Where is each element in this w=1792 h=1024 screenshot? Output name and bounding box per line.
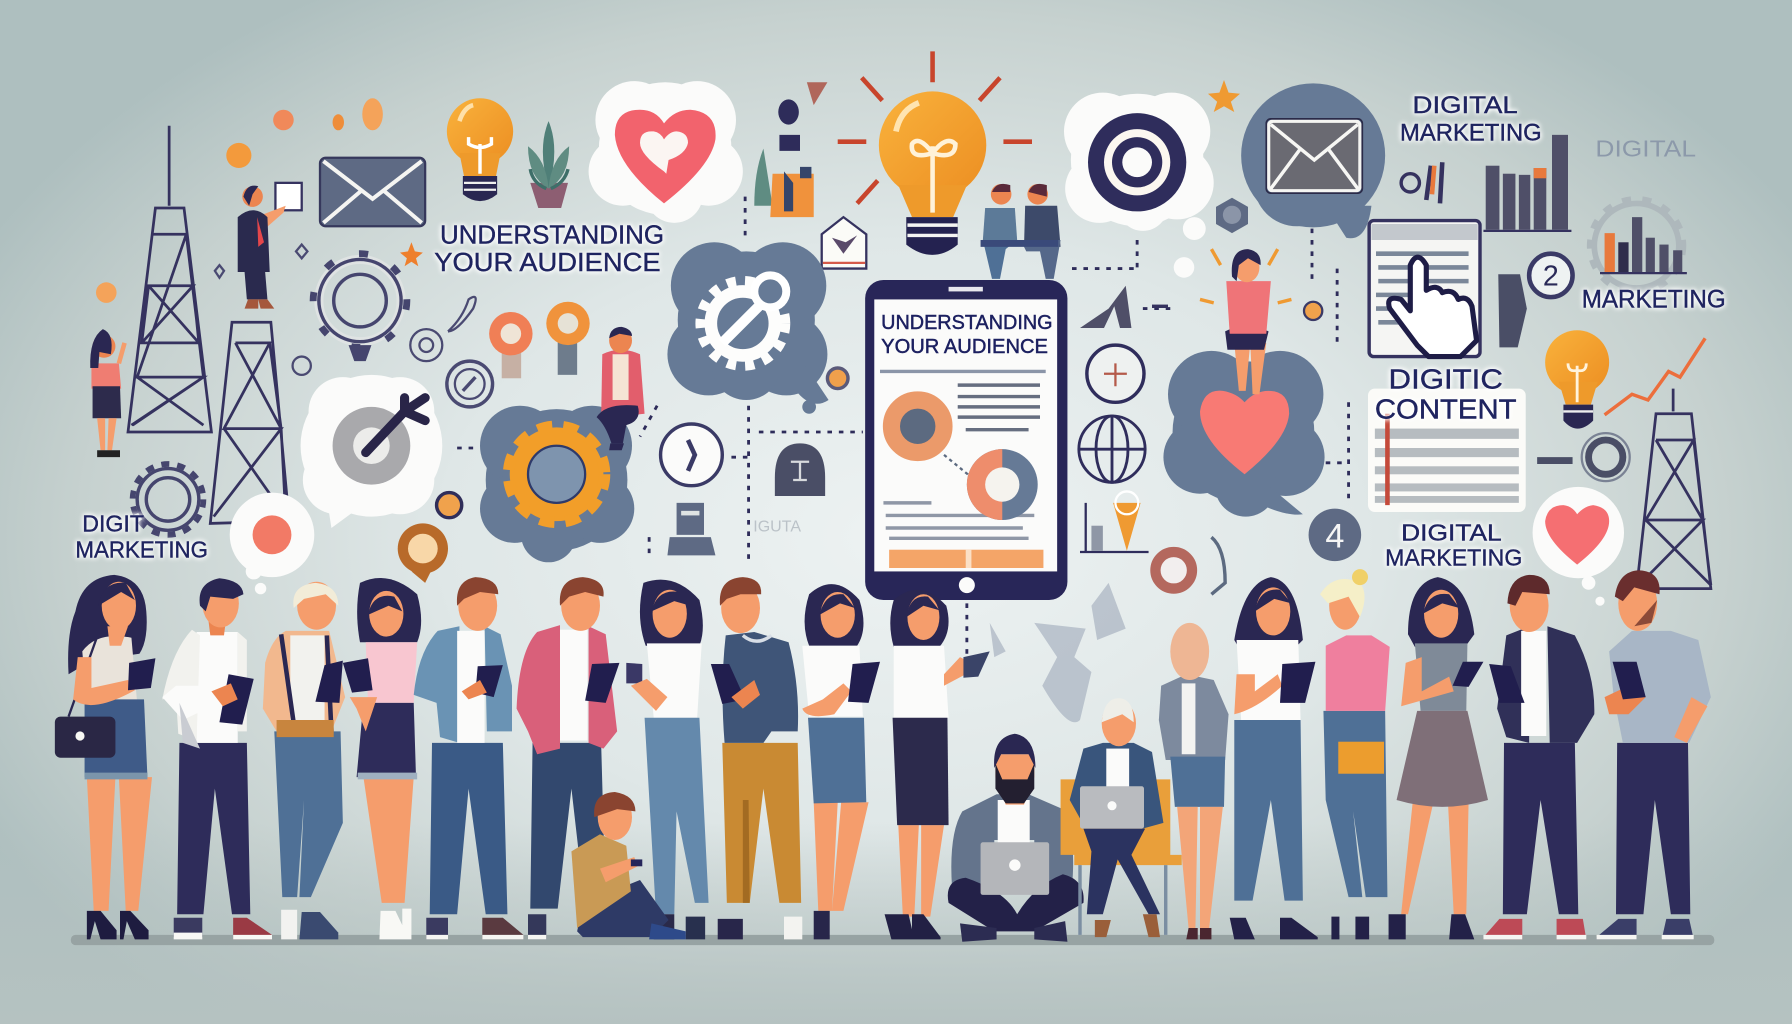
number four: 4: [1325, 517, 1344, 555]
pin icon: [398, 493, 462, 583]
heart bubble with woman: [1163, 249, 1325, 517]
person 17 man navy jacket: [1483, 575, 1594, 939]
bar icon: [1080, 491, 1149, 552]
label digital marketing left: DIGIT: [82, 510, 144, 536]
tower right: [1637, 389, 1711, 589]
person 18 man grey shirt: [1597, 570, 1711, 939]
clock icon: [1087, 345, 1144, 402]
elder woman: [1159, 623, 1229, 939]
heading: understanding your audience: YOUR AUDIENCE: [434, 247, 661, 277]
home button: [959, 577, 975, 593]
label digital marketing left: [75, 510, 208, 563]
lower right label digital marketing: [1385, 520, 1522, 571]
small mini chart: [1080, 257, 1322, 328]
person 3 blond: [263, 582, 345, 939]
small woman figure: [90, 329, 125, 457]
chair and seated elder: [1061, 698, 1182, 937]
gear chart: [1590, 199, 1687, 293]
bubble target: [1064, 93, 1214, 240]
ring mauve icon: [1155, 537, 1225, 594]
connector dashes: [457, 197, 1349, 657]
ground shadow: [71, 935, 1714, 945]
person 7 woman jeans: [626, 580, 709, 939]
bubble gear wrench: [667, 242, 829, 414]
bubble envelope: [1241, 83, 1385, 238]
house icon: [822, 217, 866, 269]
donut two: [944, 449, 1038, 520]
digital content label and document: [1368, 364, 1526, 512]
person on tower: [238, 183, 302, 309]
number four: [1309, 509, 1361, 561]
heading: understanding your audience: [434, 219, 664, 277]
star icon: [1208, 80, 1240, 112]
person 10 woman black skirt: [885, 590, 990, 939]
tablet title: [881, 312, 1053, 358]
small star: [400, 242, 423, 266]
small icons top center: [754, 82, 827, 217]
person seated on gear bubble: [597, 327, 645, 450]
child sitting: [571, 792, 686, 939]
lower right label digital marketing: DIGITAL: [1401, 520, 1502, 546]
person 16 woman skirt: [1389, 577, 1488, 939]
bar chart top right: [1483, 135, 1571, 231]
small keyhole icon: [1498, 274, 1527, 347]
heading digital content: [1375, 364, 1517, 424]
printer icon: [667, 503, 715, 555]
person 15 blonde woman: [1320, 569, 1390, 939]
bubble orange gear: [480, 406, 634, 562]
orange blobs: [96, 98, 383, 303]
sitting man with laptop: [948, 734, 1084, 942]
small hexagon icon: [1216, 198, 1248, 233]
top right label digital marketing: DIGITAL: [1413, 92, 1518, 119]
top right label digital marketing: MARKETING: [1400, 120, 1542, 147]
plant: [528, 121, 569, 208]
lightbulb right: [1545, 330, 1609, 429]
email envelope icon: [320, 158, 425, 226]
lightbulb small: [447, 98, 513, 201]
doodle icons: [215, 245, 476, 375]
small icon q: [1401, 162, 1442, 203]
bubble coral dot: [230, 493, 314, 594]
orange pin icons: [489, 302, 590, 378]
heading digital content: CONTENT: [1375, 393, 1517, 424]
person 9 woman denim skirt: [802, 584, 880, 939]
person 8 man navy sweater: [711, 577, 802, 939]
document with pointer: [1369, 221, 1480, 357]
scattered grey fragments: [990, 583, 1126, 722]
trend arrow: [1605, 338, 1705, 415]
heading: understanding your audience: UNDERSTANDING: [440, 219, 664, 249]
person 4 woman pink: [343, 578, 421, 939]
woman on heart bubble: [1200, 249, 1291, 394]
top right label digital marketing: [1400, 92, 1542, 147]
orange footer bar: [889, 550, 1043, 568]
label digital marketing left: MARKETING: [75, 537, 208, 563]
tablet title: UNDERSTANDING: [881, 312, 1053, 334]
donut one: [891, 400, 944, 453]
head icon: [775, 443, 825, 496]
gear small left: [133, 464, 203, 535]
bubble small heart: [1533, 487, 1624, 606]
ring and key: [1537, 433, 1630, 481]
person 6 man pink jacket: [517, 577, 619, 939]
orange ring icon: [827, 368, 848, 389]
two people sitting on tablet: [981, 184, 1061, 279]
globe icon: [1079, 416, 1145, 482]
person 5 man blue jacket: [414, 577, 523, 939]
tower left tall: [128, 126, 211, 432]
person 14 woman jeans: [1230, 577, 1318, 939]
person 2 man white shirt: [162, 578, 272, 939]
faint word: IGUTA: [753, 518, 801, 535]
large lightbulb and rays: [838, 51, 1032, 255]
tower left short: [210, 322, 289, 523]
gear outline: [313, 254, 407, 361]
bubble wrench target: [301, 375, 442, 528]
bubble heart: [589, 81, 743, 223]
tablet title: YOUR AUDIENCE: [881, 336, 1048, 358]
tablet chart lines: [880, 371, 1046, 538]
lower right label digital marketing: MARKETING: [1385, 545, 1522, 571]
marketing label right: MARKETING: [1582, 285, 1726, 313]
circled two: [1529, 254, 1573, 297]
circle number icon: [447, 361, 493, 407]
circled two: 2: [1543, 261, 1559, 293]
tablet: [865, 280, 1067, 600]
hand cursor: [1389, 257, 1477, 357]
heading digital content: DIGITIC: [1389, 364, 1503, 395]
person 1 woman with bag: [55, 575, 155, 939]
circle key icon: [661, 424, 722, 486]
faint digital word: DIGITAL: [1595, 136, 1696, 162]
